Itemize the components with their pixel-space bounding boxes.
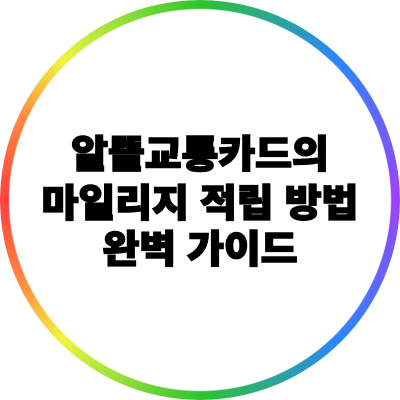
title line 3: 완벽 가이드 xyxy=(102,229,298,271)
title line 1: 알뜰교통카드의 xyxy=(71,134,329,176)
title line 2: 마일리지 적립 방법 xyxy=(42,183,358,225)
title xyxy=(42,134,358,271)
